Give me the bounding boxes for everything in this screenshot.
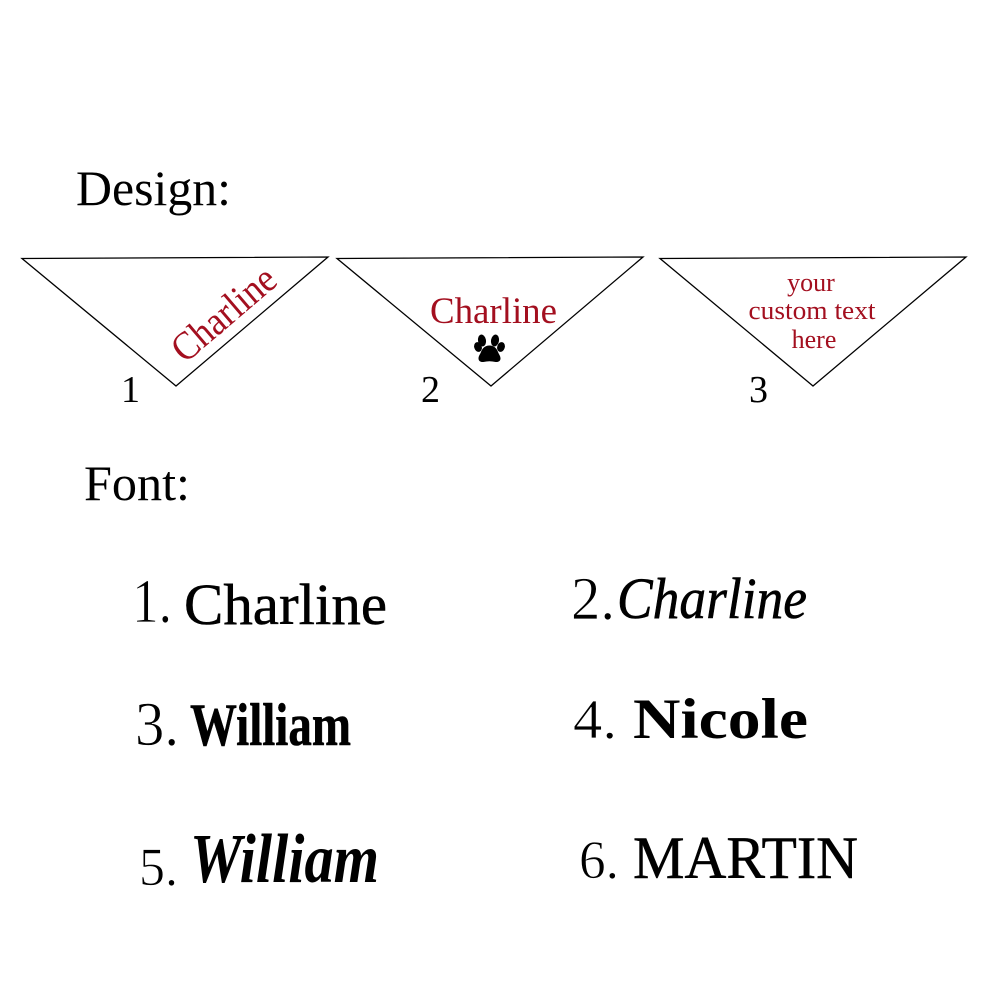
rotated name text: Charline [162,256,285,371]
design option 2 [337,257,643,411]
number 1: 1 [121,369,140,411]
font sample 5 [139,821,379,898]
font sample 2: Charline [617,566,807,631]
number 3: 3 [749,369,768,411]
font sample 1: Charline [184,572,387,637]
bandana triangle 3 [660,257,966,386]
font sample 5: 5. [139,837,178,897]
icon: paw print [473,334,506,362]
custom text [748,268,876,354]
font sample 3: 3. [135,691,179,759]
font sample 5: William [190,821,379,898]
bandana triangle 1 [22,257,328,386]
custom text: your [787,268,835,297]
font sample 4: Nicole [633,688,808,751]
font sample 6: 6. [579,830,619,890]
font sample 1: 1. [132,568,172,636]
font sample 4: 4. [573,689,617,751]
bandana triangle 2 [337,257,643,386]
number 2: 2 [421,369,440,411]
heading: Font: Font: [84,455,190,511]
font sample 3 [135,691,351,759]
name text: Charline [430,291,557,332]
design option 3 [660,257,966,411]
font sample 6: MARTIN [633,825,858,891]
design option 1 [22,256,328,411]
heading: Design: Design: [76,160,231,216]
font sample 3: William [190,692,351,758]
custom text: here [792,325,836,354]
font sample 4 [573,688,808,751]
font sample 2: 2. [571,566,615,633]
custom text: custom text [748,296,876,325]
